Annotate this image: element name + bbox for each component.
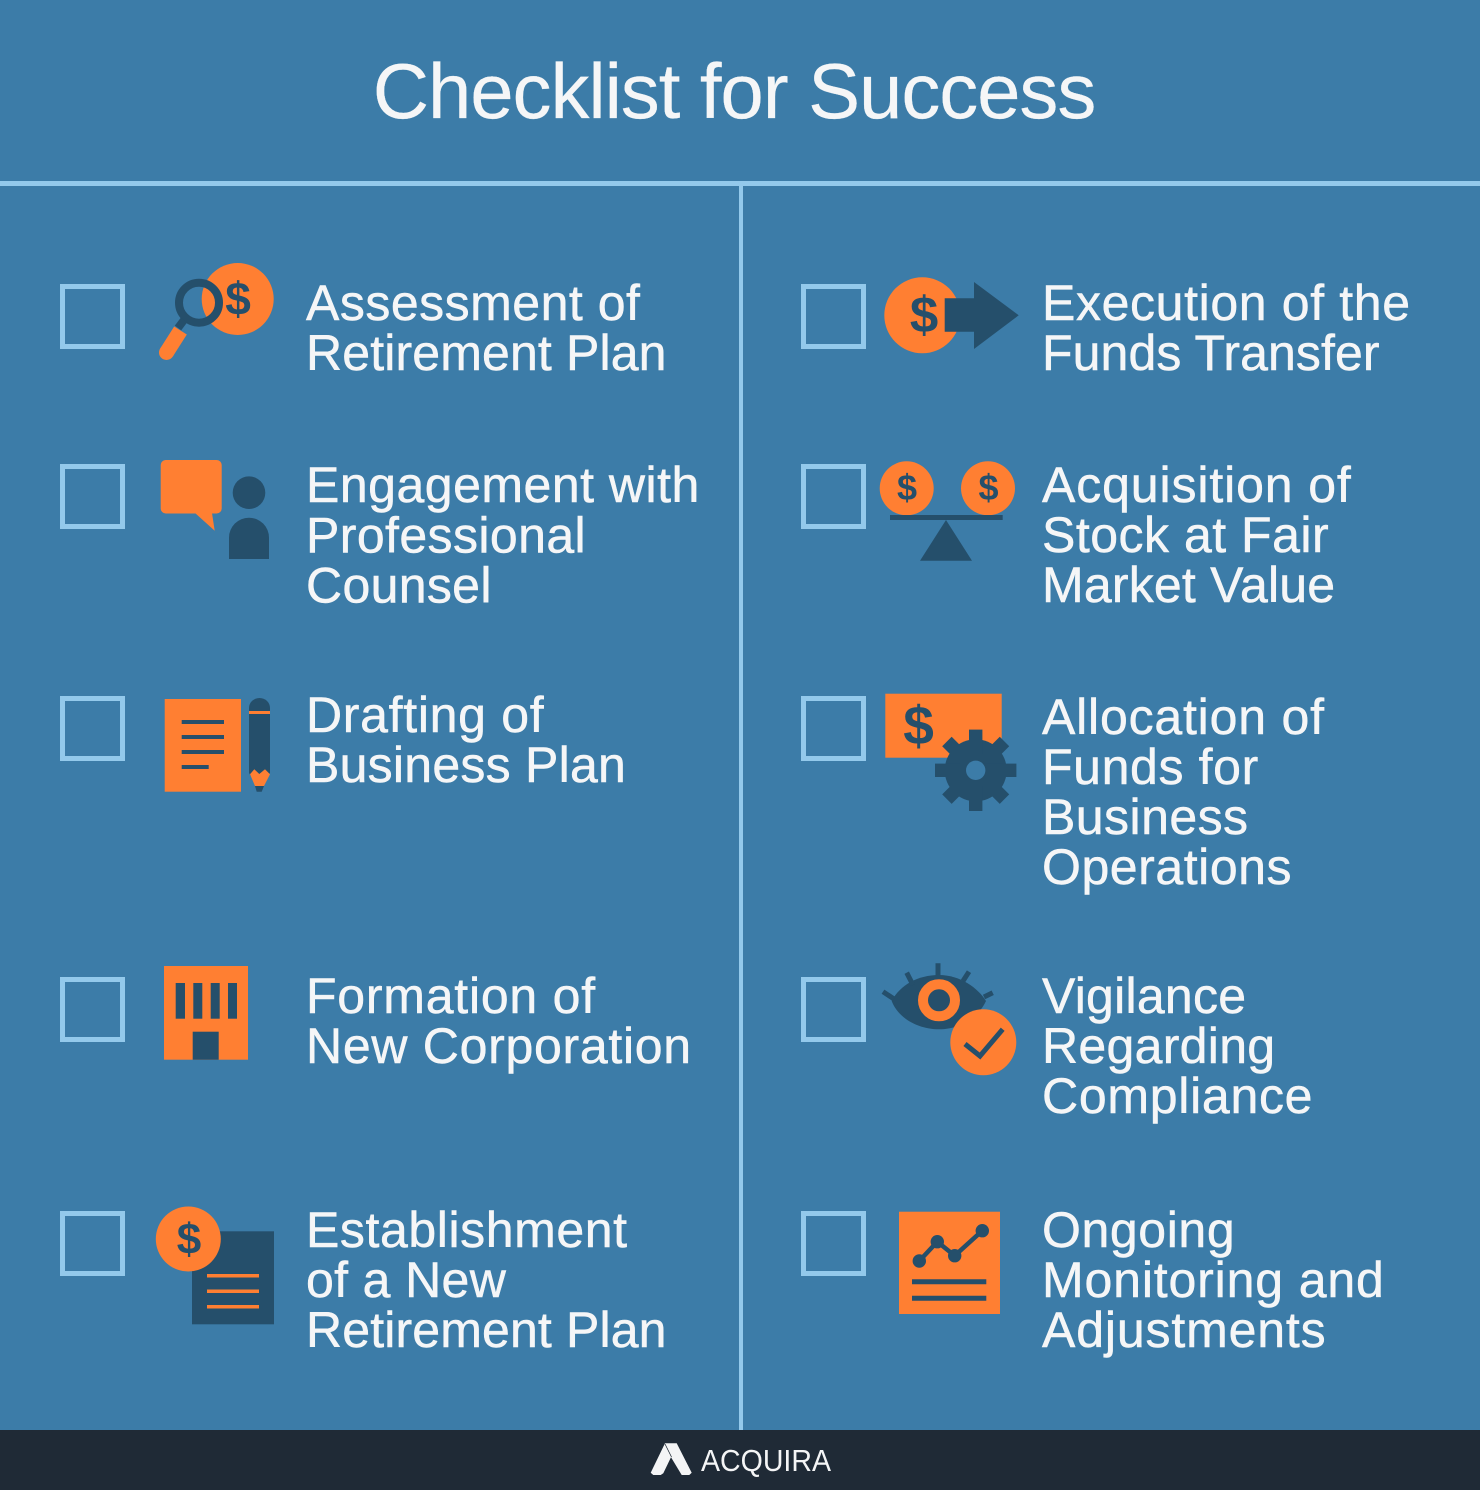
item: Ongoing Monitoring and Adjustments: Adjustments bbox=[1042, 1302, 1326, 1358]
checkbox bbox=[62, 980, 122, 1040]
label: Establishment bbox=[306, 1202, 628, 1258]
label: Allocation of bbox=[1042, 689, 1325, 745]
item: Vigilance Regarding Compliance: Regarding bbox=[1042, 1018, 1275, 1074]
icon: dollar bill and gear bbox=[885, 694, 1016, 811]
icon: dollar coin with arrow: $ bbox=[910, 286, 938, 343]
icon: Acquira logo mark bbox=[651, 1443, 692, 1475]
checkbox bbox=[804, 980, 864, 1040]
checkbox bbox=[804, 1214, 864, 1274]
item: Allocation of Funds for Business Operations bbox=[804, 689, 1325, 895]
icon: magnifier over dollar coin bbox=[159, 263, 274, 360]
icon: dollar bill and gear: $ bbox=[903, 694, 934, 756]
checkbox bbox=[804, 466, 864, 526]
icon: document and pencil bbox=[165, 698, 270, 792]
item: Assessment of Retirement Plan bbox=[62, 263, 667, 381]
item: Drafting of Business Plan: Business Plan bbox=[306, 737, 626, 793]
item: Allocation of Funds for Business Operations: Operations bbox=[1042, 839, 1292, 895]
item: Vigilance Regarding Compliance bbox=[804, 963, 1313, 1124]
icon: balance scale with coins bbox=[880, 461, 1015, 561]
item: Execution of the Funds Transfer: Funds Transfer bbox=[1042, 325, 1380, 381]
checkbox bbox=[62, 286, 122, 346]
checkbox bbox=[62, 466, 122, 526]
logo wordmark: ACQUIRA bbox=[701, 1443, 831, 1478]
item: Acquisition of Stock at Fair Market Value bbox=[804, 457, 1352, 613]
item: Execution of the Funds Transfer bbox=[804, 275, 1411, 381]
icon: balance scale with coins: $ bbox=[978, 467, 999, 508]
item: Assessment of Retirement Plan: Retirement Plan bbox=[306, 325, 667, 381]
checkbox bbox=[62, 1214, 122, 1274]
label: Formation of bbox=[306, 968, 596, 1024]
item: Vigilance Regarding Compliance: Compliance bbox=[1042, 1068, 1313, 1124]
footer bar bbox=[0, 1430, 1480, 1490]
item: Acquisition of Stock at Fair Market Value: Stock at Fair bbox=[1042, 507, 1329, 563]
item: Drafting of Business Plan bbox=[62, 687, 626, 793]
item: Establishment of a New Retirement Plan: Retirement Plan bbox=[306, 1302, 667, 1358]
label: Acquisition of bbox=[1042, 457, 1352, 513]
label: Execution of the bbox=[1042, 275, 1411, 331]
label: Ongoing bbox=[1042, 1202, 1235, 1258]
icon: dollar coin and document bbox=[156, 1206, 274, 1324]
checkbox bbox=[804, 286, 864, 346]
icon: dollar coin with arrow bbox=[884, 277, 1019, 353]
item: Establishment of a New Retirement Plan bbox=[62, 1202, 667, 1358]
item: Allocation of Funds for Business Operations: Funds for bbox=[1042, 739, 1259, 795]
label: Engagement with bbox=[306, 457, 700, 513]
icon: magnifier over dollar coin: $ bbox=[225, 272, 251, 324]
icon: speech bubble and person bbox=[161, 460, 269, 559]
label: Assessment of bbox=[306, 275, 640, 331]
checkbox bbox=[804, 698, 864, 758]
checkbox bbox=[62, 698, 122, 758]
icon: building bbox=[164, 966, 248, 1060]
label: Vigilance bbox=[1042, 968, 1246, 1024]
icon: line chart report bbox=[899, 1212, 1000, 1314]
item: Establishment of a New Retirement Plan: of a New bbox=[306, 1252, 507, 1308]
item: Ongoing Monitoring and Adjustments bbox=[804, 1202, 1385, 1358]
item: Allocation of Funds for Business Operations: Business bbox=[1042, 789, 1248, 845]
icon: dollar coin and document: $ bbox=[177, 1215, 201, 1264]
item: Engagement with Professional Counsel bbox=[62, 457, 700, 614]
icon: balance scale with coins: $ bbox=[897, 467, 917, 508]
item: Engagement with Professional Counsel: Counsel bbox=[306, 558, 492, 614]
title: Checklist for Success bbox=[373, 47, 1095, 135]
label: Drafting of bbox=[306, 687, 544, 743]
item: Acquisition of Stock at Fair Market Value: Market Value bbox=[1042, 557, 1335, 613]
item: Formation of New Corporation: New Corporation bbox=[306, 1018, 692, 1074]
item: Ongoing Monitoring and Adjustments: Monitoring and bbox=[1042, 1252, 1385, 1308]
item: Formation of New Corporation bbox=[62, 966, 692, 1074]
icon: eye with check badge bbox=[883, 963, 1016, 1075]
item: Engagement with Professional Counsel: Professional bbox=[306, 508, 586, 564]
